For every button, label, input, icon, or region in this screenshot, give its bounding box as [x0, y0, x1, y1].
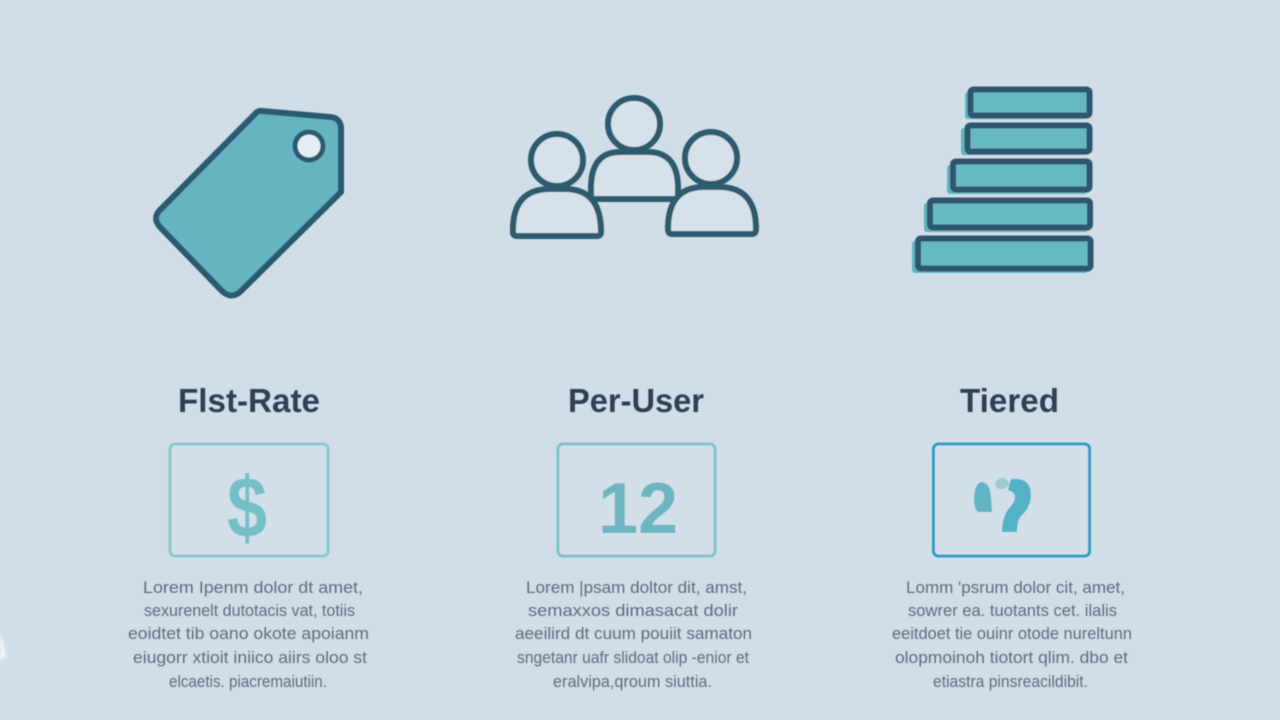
user: right	[668, 132, 756, 234]
icon: price tag	[156, 111, 341, 295]
tier bar 4	[924, 200, 1090, 232]
tier bar 5	[912, 238, 1090, 273]
text block: per-user description: aeeilird dt cuum pouiit samaton	[515, 624, 752, 643]
text block: flat-rate description	[128, 578, 369, 691]
tier bar 1	[965, 90, 1090, 119]
text block: tiered description: olopmoinoh tiotort qlim. dbo et	[895, 648, 1128, 667]
heading: per-user: Per-User	[568, 382, 704, 419]
tier bar 3	[947, 162, 1090, 194]
text block: flat-rate description: Lorem Ipenm dolor dt amet,	[143, 578, 363, 597]
text block: flat-rate description: eiugorr xtioit iniico aiirs oloo st	[133, 648, 367, 667]
symbol box: number 12	[558, 444, 715, 556]
tier bar 2	[961, 126, 1090, 155]
text block: flat-rate description: elcaetis. piacremaiutiin.	[169, 672, 327, 691]
symbol box: abstract glyph	[934, 444, 1090, 556]
text block: tiered description	[892, 578, 1132, 691]
panel: flat-rate	[128, 111, 369, 691]
text block: tiered description: etiastra pinsreacildibit.	[933, 672, 1088, 691]
heading: tiered: Tiered	[960, 382, 1059, 419]
text block: tiered description: Lomm 'psrum dolor cit, amet,	[906, 578, 1125, 597]
user: centre	[591, 98, 678, 199]
panel: tiered	[892, 90, 1132, 691]
icon: stacked tier bars	[912, 90, 1090, 273]
heading: flat-rate: Flst-Rate	[178, 382, 320, 419]
symbol box: dollar: $	[227, 459, 267, 555]
panel: per-user	[513, 98, 756, 691]
text block: tiered description: eeitdoet tie ouinr otode nureltunn	[892, 624, 1132, 643]
icon: group of three users	[513, 98, 756, 236]
user: left	[513, 134, 601, 236]
symbol box: dollar	[170, 444, 328, 556]
symbol box: number 12: 12	[598, 469, 678, 549]
text block: per-user description	[515, 578, 752, 691]
text block: per-user description: eralvipa,qroum siuttia.	[553, 672, 712, 691]
text block: flat-rate description: eoidtet tib oano okote apoianm	[128, 624, 369, 643]
decorative glare at left edge	[0, 630, 6, 660]
text block: flat-rate description: sexurenelt dutotacis vat, totiis	[144, 601, 355, 620]
text block: tiered description: sowrer ea. tuotants cet. ilalis	[908, 601, 1117, 620]
text block: per-user description: Lorem |psam doltor dit, amst,	[526, 578, 747, 597]
text block: per-user description: sngetanr uafr slidoat olip -enior et	[517, 648, 749, 667]
text block: per-user description: semaxxos dimasacat dolir	[528, 601, 738, 620]
